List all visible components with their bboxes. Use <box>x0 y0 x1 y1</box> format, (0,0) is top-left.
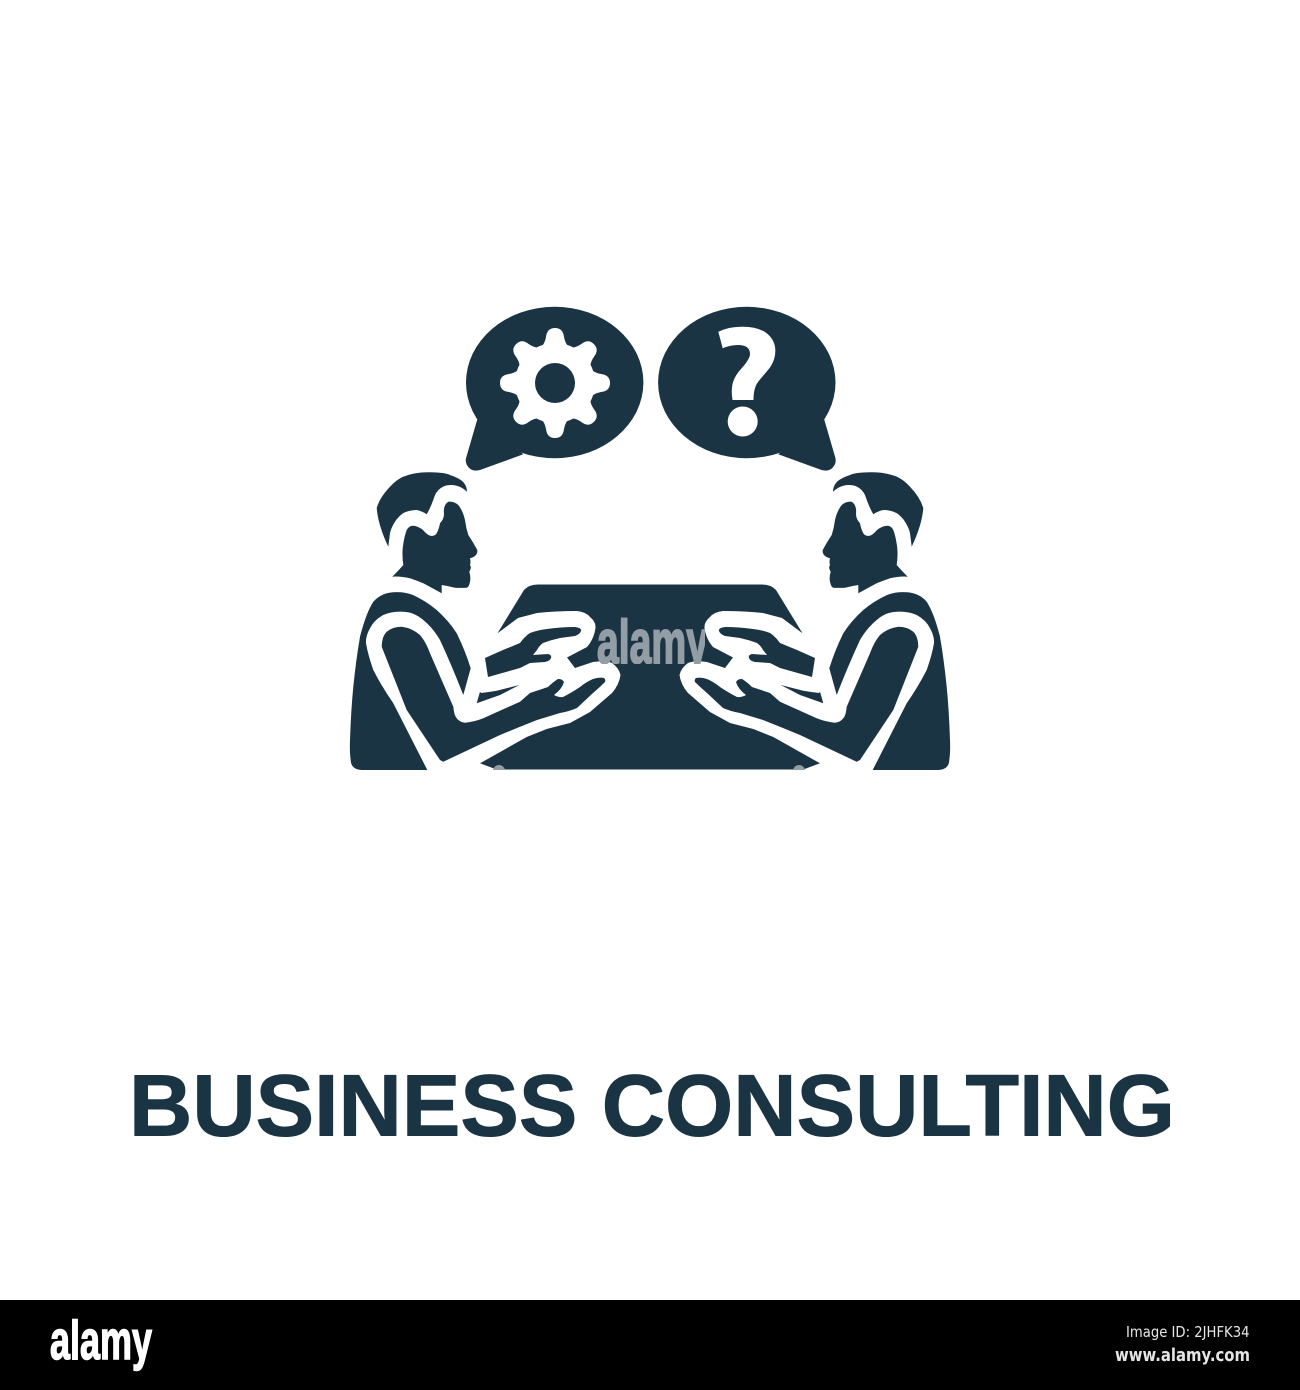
icon: question mark <box>718 327 775 436</box>
arm with open hand <box>382 627 605 762</box>
hand sliver <box>477 685 519 703</box>
hand sliver <box>781 685 823 703</box>
hair <box>377 472 467 547</box>
icon: gear <box>500 328 610 438</box>
left consultant figure <box>350 472 605 770</box>
footer logo: alamy <box>50 1309 152 1371</box>
speech bubble with gear <box>466 307 643 471</box>
torso <box>350 592 471 770</box>
title: BUSINESS CONSULTING <box>129 1058 1175 1154</box>
footer bar <box>0 1300 1300 1390</box>
website: www.alamy.com <box>1115 1345 1250 1366</box>
watermark on table <box>493 608 805 777</box>
arm with open hand <box>695 627 918 762</box>
torso <box>829 592 950 770</box>
image id: Image ID: 2JHFK34 <box>1126 1323 1250 1341</box>
upper hand <box>719 627 815 677</box>
hair <box>833 472 923 547</box>
right consultant figure <box>695 472 950 770</box>
meeting table <box>480 584 820 770</box>
face and neck <box>392 502 477 593</box>
upper hand <box>485 627 581 677</box>
face and neck <box>823 502 908 593</box>
speech bubble with question mark <box>658 307 836 471</box>
infographic canvas <box>0 306 1300 1390</box>
watermark on table: alamy <box>597 608 708 676</box>
